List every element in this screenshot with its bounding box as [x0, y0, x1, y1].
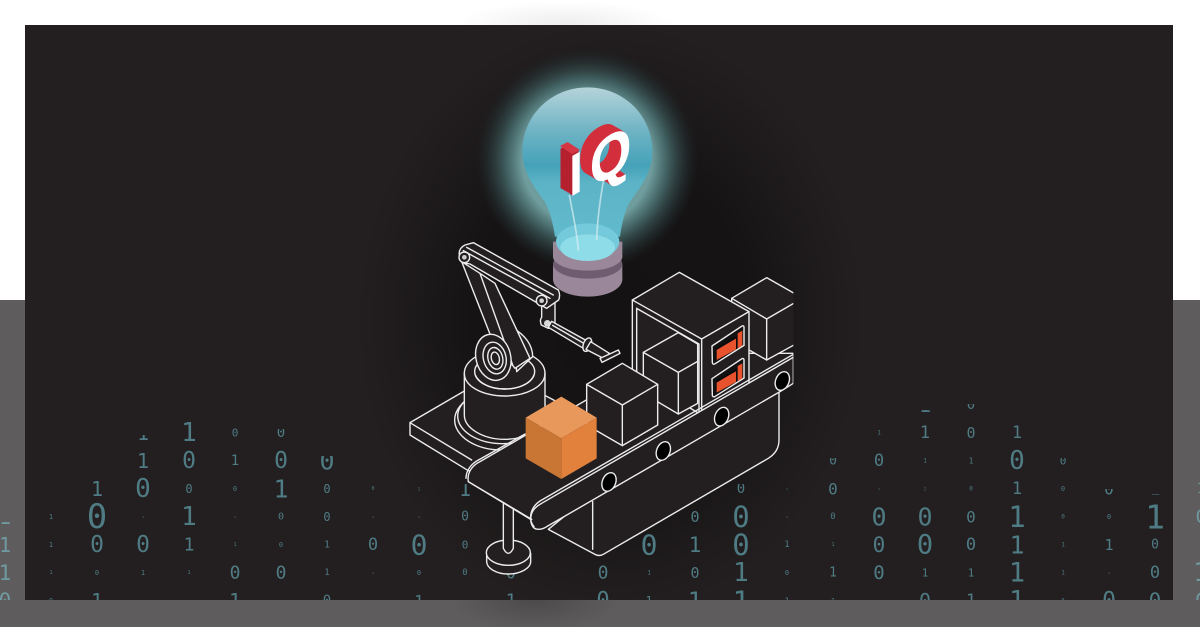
binary digits: right field: 0 [1061, 485, 1065, 493]
binary digits: centre field: 0 [598, 562, 608, 584]
binary digits: left field: 0 [90, 532, 104, 558]
binary digits: centre field: 1 [784, 540, 790, 550]
binary digits: right field: 0 [873, 562, 885, 584]
binary digits: left field: 1 [372, 571, 374, 575]
binary digits: left field: 0 [95, 569, 99, 577]
binary digits: right field: 0 [1060, 454, 1066, 468]
conveyor front rail [468, 354, 793, 527]
binary digits: left field: 0 [323, 593, 331, 609]
bulb screw base [553, 242, 622, 297]
binary digits: left field: 1 [49, 570, 53, 576]
binary digits: right field: 0 [1009, 446, 1025, 476]
binary digits: right field: 1 [1009, 530, 1025, 560]
binary digits: left field: 0 [232, 426, 238, 440]
top facet of letter I [560, 142, 580, 154]
robot gripper shaft [548, 321, 620, 362]
binary digits: centre field: 1 [733, 558, 749, 588]
binary digits: left field: 1 [231, 453, 239, 469]
binary digits: left field: 1 [273, 474, 289, 504]
robot rotor ring [464, 360, 546, 397]
robot upper arm [459, 243, 560, 308]
binary digits: right field: 0 [1150, 563, 1160, 583]
binary digits: left field: 0 [323, 510, 331, 524]
binary digits: centre field: 1 [506, 590, 516, 612]
binary digits: right field: 1 [969, 456, 974, 466]
robot flange [454, 401, 512, 450]
page background: white top [0, 0, 1200, 300]
robot gripper hanger [540, 298, 555, 328]
binary digits: left field: 1 [91, 477, 103, 501]
rear cube [732, 278, 800, 360]
binary digits: right field: 1 [1150, 478, 1160, 500]
binary digits: right field: 0 [1102, 588, 1116, 614]
binary digits: left field: 1 [141, 569, 145, 577]
roller holes [599, 370, 792, 493]
binary digits: left field: 1 [324, 540, 330, 550]
letter Q: Q [578, 103, 620, 196]
binary digits: right field: 0 [1061, 598, 1065, 604]
binary digits on the right margin [1196, 482, 1200, 600]
binary digits: right field: 0 [1061, 514, 1065, 520]
binary digits: right field: 0 [1107, 513, 1111, 521]
letter Q: Q [584, 107, 626, 200]
inspection machine [632, 272, 749, 415]
binary digits: right field: 1 [1012, 423, 1022, 443]
binary digits: right field: 0 [1104, 480, 1114, 498]
binary digits: left field: 1 [181, 418, 197, 448]
IQ letters [557, 96, 632, 218]
binary digits: right field: 0 [917, 502, 933, 532]
binary digits: left field: 1 [187, 570, 191, 576]
binary digits: right field: 0 [828, 480, 838, 498]
binary digits: centre field: 1 [418, 486, 421, 492]
binary digits: left field: 0 [276, 562, 286, 584]
letter Q: Q [581, 105, 622, 198]
binary digits: left field: 1 [142, 515, 144, 519]
orange cube [526, 397, 597, 479]
binary digits: centre field: 1 [786, 515, 788, 519]
binary digits: right field: 1 [831, 597, 835, 605]
binary digits: centre field: 1 [688, 587, 702, 615]
conveyor body centre fold [592, 501, 594, 550]
binary digits: right field: 1 [968, 566, 974, 580]
binary digits on the left margin [0, 522, 10, 600]
binary digits: left field: 0 [277, 425, 285, 441]
binary digits: centre field: 0 [462, 568, 468, 578]
robot base plate [409, 390, 556, 472]
binary digits: centre field: 0 [641, 528, 657, 562]
binary digits: right field: 0 [967, 397, 975, 413]
binary digits: centre field: 0 [411, 528, 427, 562]
binary digits: left field: 1 [234, 515, 236, 519]
letter Q: Q [587, 108, 628, 201]
binary digits: right field: 1 [877, 430, 881, 436]
letter I: I [567, 136, 581, 209]
binary digits: left field: 0 [230, 562, 240, 584]
binary digits: centre field: 0 [690, 508, 700, 526]
binary digits: right field: 1 [829, 566, 837, 580]
binary digits: centre field: 0 [596, 588, 610, 614]
binary digits: left field: 1 [49, 513, 53, 521]
binary digits: centre field: 1 [414, 592, 424, 610]
binary digits: right field: 0 [919, 589, 931, 613]
binary digits: centre field: 1 [733, 584, 749, 618]
binary digits: right field: 1 [966, 591, 976, 611]
binary digits: left field: 1 [372, 515, 374, 519]
binary digits: right field: 0 [1151, 538, 1159, 552]
binary digits: right field: 0 [874, 451, 884, 471]
machine display: lower [712, 358, 744, 397]
binary digits: left field: 0 [319, 446, 335, 476]
binary digits: centre field: 0 [737, 481, 745, 497]
binary digits: left field: 1 [233, 542, 237, 548]
binary digits: left field: 1 [184, 534, 194, 556]
binary digits: right field: 0 [966, 508, 976, 526]
binary digits: left field: 1 [49, 541, 53, 549]
binary digits: right field: 0 [917, 530, 933, 560]
binary digits: left field: 1 [229, 589, 241, 613]
binary digits: right field: 0 [969, 486, 973, 492]
binary digits: right field: 1 [919, 393, 931, 417]
binary digits: right field: 1 [1061, 542, 1065, 548]
binary digits: centre field: 0 [462, 538, 468, 552]
black cube on belt [587, 363, 658, 446]
soft shadow above panel [455, 1, 675, 49]
letter I: I [568, 137, 582, 210]
binary digits: right field: 1 [1061, 570, 1065, 576]
letter Q: Q [582, 106, 624, 199]
binary digits: left field: 1 [91, 589, 103, 613]
binary digits: centre field: 1 [459, 477, 471, 501]
binary digits: right field: 1 [1145, 498, 1165, 536]
binary digits: right field: 0 [873, 533, 885, 557]
letter Q: Q [590, 110, 632, 203]
letter I: I [560, 132, 574, 205]
robot wheel joint [474, 334, 512, 382]
binary digits: left field: 0 [323, 482, 331, 496]
binary digits: right field: 0 [966, 424, 976, 442]
binary digits: left field: 0 [87, 497, 107, 537]
binary digits: centre field: 1 [689, 533, 701, 557]
letter I [557, 124, 583, 218]
robot lower arm [462, 262, 533, 372]
binary digits: left field: 1 [324, 568, 330, 578]
letter I: I [564, 135, 578, 208]
binary digits: left field: 1 [137, 421, 149, 445]
binary digits: centre field: 1 [647, 570, 651, 576]
conveyor side band [531, 357, 793, 529]
binary digits: left field: 1 [232, 400, 238, 410]
cube inside machine [643, 333, 698, 414]
binary digits: right field: 1 [878, 487, 880, 491]
binary digits: left field: 0 [279, 541, 283, 549]
soft shadow below panel [450, 570, 620, 627]
binary digits: centre field: 0 [690, 564, 700, 582]
binary digits: right field: 0 [871, 502, 887, 532]
binary digits: left field: 0 [135, 474, 151, 504]
binary digits: right field: 1 [1104, 536, 1114, 554]
conveyor illustration [410, 243, 800, 574]
letter Q [578, 96, 632, 210]
page background: grey lower band [0, 300, 1200, 627]
binary digits: right field: 1 [922, 566, 928, 580]
letter Q: Q [583, 106, 625, 199]
binary digits: centre field: 0 [732, 528, 750, 562]
letter Q: Q [581, 105, 623, 198]
letter I: I [563, 134, 577, 207]
binary digits: right field: 1 [920, 423, 930, 443]
letter I: I [557, 131, 571, 204]
letter I: I [561, 133, 575, 206]
binary digits: right field: 1 [1008, 500, 1026, 534]
binary digits: left field: 0 [371, 486, 375, 492]
letter Q: Q [587, 109, 629, 202]
bulb glass [522, 87, 652, 237]
binary digits: centre field: 1 [786, 487, 788, 491]
light bulb [522, 87, 652, 297]
bulb inner light pool [556, 223, 619, 261]
binary digits: left field [49, 422, 377, 600]
robot cylinder body [464, 349, 545, 439]
conveyor belt surface [468, 353, 793, 520]
binary digits: left field: 1 [181, 502, 197, 532]
binary digits: right field: 1 [831, 542, 835, 548]
letter Q: Q [580, 104, 621, 197]
binary digits: centre field: 0 [732, 500, 750, 534]
binary digits: left field: 0 [368, 535, 378, 555]
binary digits: centre field: 1 [785, 596, 790, 606]
binary digits: right field: 1 [1009, 586, 1025, 616]
letter Q: Q [579, 104, 621, 197]
binary digits: centre field: 0 [506, 564, 516, 582]
bulb glow [475, 48, 699, 272]
binary digits: left field: 0 [233, 485, 237, 493]
binary digits: centre field: 1 [418, 515, 420, 519]
binary digits: left field: 0 [185, 482, 193, 496]
conveyor belt rear rail [466, 434, 525, 478]
binary digits: right field: 1 [1012, 479, 1022, 499]
conveyor support leg and foot [486, 503, 531, 574]
letter Q: Q [589, 110, 631, 203]
binary digits: right field [829, 404, 1163, 600]
letter I: I [568, 137, 582, 210]
letter I: I [562, 134, 576, 207]
binary digits: centre field: 1 [645, 594, 653, 608]
binary digits: centre field: 0 [461, 510, 469, 524]
letter I: I [559, 132, 573, 205]
binary digits: centre field: 0 [785, 569, 789, 577]
conveyor lower body [548, 387, 779, 555]
binary digits: centre field: 0 [417, 569, 421, 577]
letter I: I [565, 135, 579, 208]
binary digits: centre field [412, 484, 790, 600]
binary digits: left field: 0 [49, 597, 53, 605]
binary digits: right field: 0 [1149, 589, 1161, 613]
letter Q: Q [588, 110, 630, 202]
binary digits: right field: 0 [966, 535, 976, 555]
letter Q: Q [585, 107, 627, 200]
letter Q: Q [586, 108, 627, 201]
letter I: I [558, 131, 572, 204]
letter I: I [561, 133, 575, 206]
letter I: I [569, 138, 583, 211]
letter I: I [566, 136, 580, 209]
binary digits: left field: 0 [278, 512, 284, 522]
binary digits: right field: 0 [829, 454, 837, 468]
binary digits: right field: 1 [924, 486, 927, 492]
bulb filaments [569, 179, 604, 251]
binary digits: right field: 1 [1009, 558, 1025, 588]
machine display: upper [712, 326, 744, 364]
binary digits: left field: 1 [137, 449, 149, 473]
binary digits: right field: 1 [1108, 571, 1110, 575]
binary digits: left field: 0 [274, 448, 288, 474]
binary digits: left field: 0 [182, 448, 196, 474]
binary digits: right field: 0 [830, 512, 836, 522]
binary digits: left field: 0 [136, 532, 150, 558]
binary digits: right field: 1 [923, 458, 927, 464]
